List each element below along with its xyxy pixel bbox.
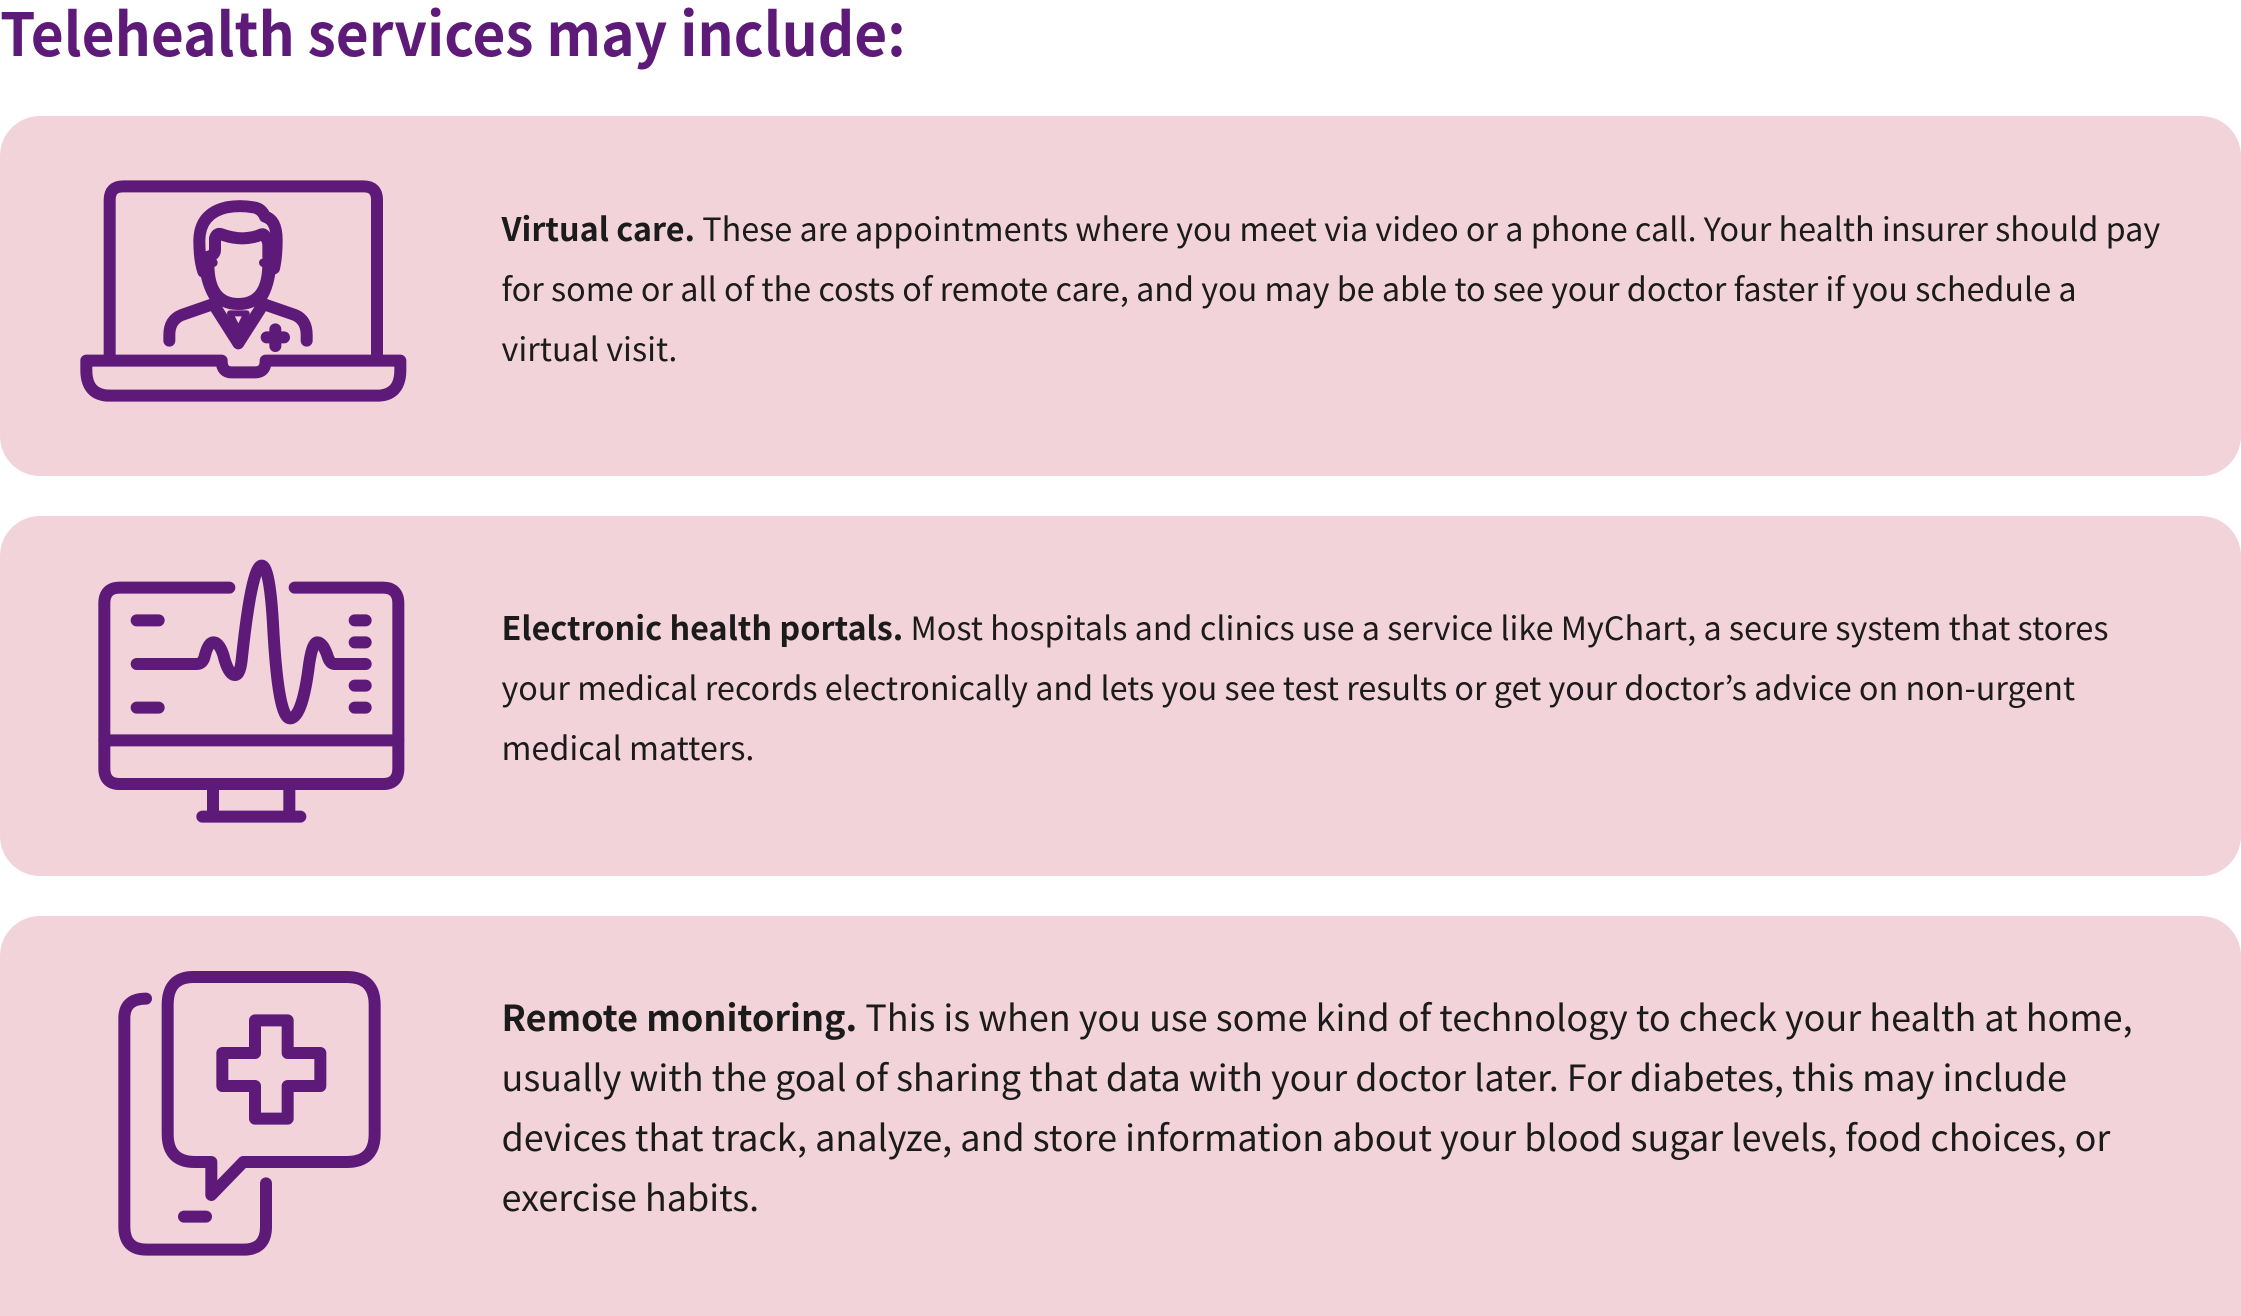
panel: remote monitoring (0, 916, 2241, 1316)
text: electronic health portals: Electronic health portals. Most hospitals and clinics use a service like MyChart, a secure system that stores (502, 602, 2108, 650)
panel: electronic health portals (0, 516, 2241, 876)
text: remote monitoring: exercise habits. (502, 1170, 759, 1222)
text: remote monitoring: devices that track, analyze, and store information about your blood sugar levels, food choices, or (502, 1110, 2110, 1162)
text: virtual care: for some or all of the costs of remote care, and you may be able to see your doctor faster if you schedule a (502, 264, 2077, 311)
text: virtual care (501, 204, 2160, 371)
text: electronic health portals (502, 602, 2108, 770)
panel: virtual care (0, 116, 2241, 476)
text: virtual care: virtual visit. (502, 324, 677, 371)
icon: doctor on laptop (80, 180, 406, 402)
text: remote monitoring: usually with the goal of sharing that data with your doctor later. For diabetes, this may include (502, 1050, 2067, 1102)
icon: monitor with pulse (98, 560, 404, 823)
text: electronic health portals: medical matters. (502, 722, 754, 770)
text: electronic health portals: your medical records electronically and lets you see test results or get your doctor’s advice on non-urgent (502, 662, 2075, 710)
text: remote monitoring (502, 990, 2133, 1222)
text: virtual care: Virtual care. These are appointments where you meet via video or a phone call. Your health insurer should pay (502, 204, 2160, 251)
icon: phone with medical speech bubble (118, 971, 381, 1256)
text: remote monitoring: Remote monitoring. This is when you use some kind of technology to check your health at home, (502, 990, 2133, 1042)
